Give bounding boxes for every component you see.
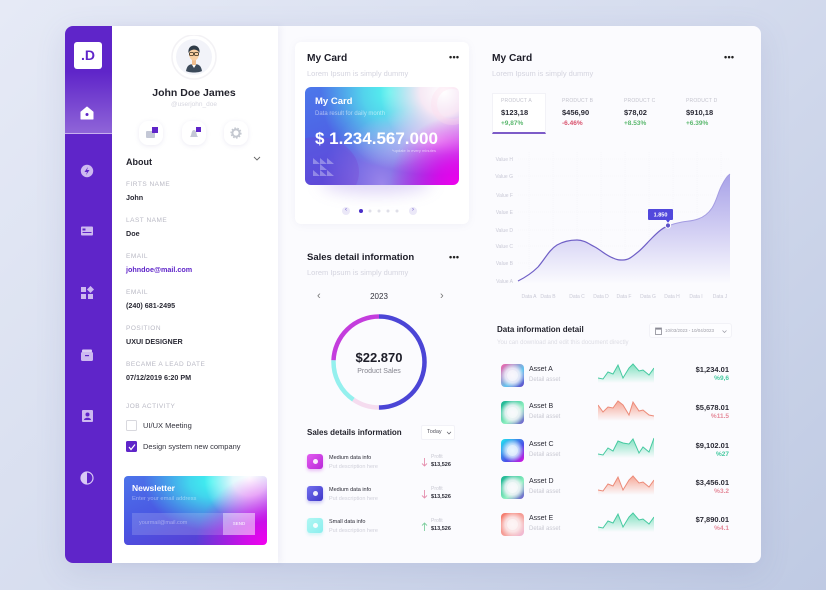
asset b value: $5,678.01 — [696, 403, 729, 412]
year selector: › — [440, 290, 444, 302]
area chart: Data A — [521, 294, 537, 300]
settings button — [224, 121, 248, 145]
carousel arrow left: ‹ — [345, 207, 347, 213]
icon: mail — [146, 127, 158, 138]
asset b thumbnail — [501, 401, 524, 424]
sales row 1: Medium data info — [329, 454, 371, 460]
sales row 1: $13,526 — [431, 462, 451, 468]
sales row 2: $13,526 — [431, 494, 451, 500]
product b — [562, 98, 593, 127]
asset a detail: Detail asset — [529, 377, 560, 383]
area chart: Value D — [496, 228, 513, 234]
product d: $910,18 — [686, 108, 713, 117]
job activity label: JOB ACTIVITY — [126, 403, 175, 410]
area chart: Data I — [689, 294, 703, 300]
active tab — [492, 93, 546, 134]
asset d sparkline — [598, 475, 654, 494]
checkbox: design system: Design system new company — [143, 442, 241, 451]
menu dots: ••• — [449, 52, 459, 62]
sidebar navigation — [65, 26, 112, 563]
logo — [74, 42, 102, 69]
asset e value: $7,890.01 — [696, 515, 729, 524]
position field — [126, 325, 183, 346]
asset d thumbnail — [501, 476, 524, 499]
product b: $456,90 — [562, 108, 589, 117]
last name field: Doe — [126, 229, 140, 238]
area chart: Value H — [496, 157, 513, 163]
year selector: ‹ — [317, 290, 321, 302]
product c: PRODUCT C — [624, 98, 655, 104]
asset d detail: Detail asset — [529, 489, 560, 495]
asset a name: Asset A — [529, 366, 553, 373]
sales row 1: Put description here — [329, 464, 378, 470]
donut value: $22.870 — [356, 350, 402, 365]
profile panel — [112, 26, 278, 563]
lead date field — [126, 361, 205, 382]
icon: archive box — [81, 350, 93, 361]
asset c detail: Detail asset — [529, 452, 560, 458]
icon: bell — [190, 127, 201, 137]
area chart: 1.850 — [654, 212, 667, 218]
area chart: Data H — [664, 294, 680, 300]
icon: cyan star — [307, 518, 323, 533]
last name field — [126, 217, 167, 238]
icon: blue star — [307, 486, 323, 501]
email field: johndoe@mail.com — [126, 265, 192, 274]
icon: magenta star — [307, 454, 323, 469]
checkbox: design system — [126, 441, 241, 452]
asset d name: Asset D — [529, 478, 554, 485]
date picker: 10/03/2023 - 10/04/2023 — [665, 328, 714, 333]
icon: contrast — [80, 471, 94, 485]
card note: *update in every minutes — [392, 148, 436, 153]
area chart: Data C — [569, 294, 585, 300]
area chart: Data G — [640, 294, 656, 300]
newsletter card — [124, 476, 267, 545]
asset c name: Asset C — [529, 441, 554, 448]
today dropdown — [421, 425, 455, 440]
phone field — [126, 289, 175, 310]
email field: EMAIL — [126, 253, 148, 260]
product d: +6.39% — [686, 120, 708, 127]
asset b percent: %11.5 — [711, 413, 729, 420]
icon: contacts — [82, 410, 93, 422]
send button: SEND — [233, 521, 245, 526]
about heading: About — [126, 157, 152, 167]
asset e percent: %4.1 — [714, 525, 729, 532]
newsletter title: Newsletter — [132, 483, 175, 493]
sales row 3: $13,526 — [431, 526, 451, 532]
first name field — [126, 181, 170, 202]
decorative ring — [431, 83, 473, 125]
asset a thumbnail — [501, 364, 524, 387]
phone field: (240) 681-2495 — [126, 301, 175, 310]
email input — [132, 513, 223, 535]
card heading: My Card — [315, 96, 352, 107]
donut chart — [331, 314, 427, 410]
profile name: John Doe James — [152, 87, 236, 99]
mail button — [139, 121, 163, 145]
carousel dots — [359, 209, 398, 213]
year selector — [317, 290, 444, 302]
sales row 1 — [306, 454, 451, 472]
newsletter subtitle: Enter your email address — [132, 496, 196, 502]
panel: my card — [295, 42, 469, 224]
sales heading: Sales detail information — [307, 252, 414, 263]
area chart: Value C — [496, 244, 513, 250]
triangle pattern — [313, 158, 334, 176]
icon: id card — [81, 226, 93, 236]
product c — [624, 98, 655, 127]
checkbox: meeting — [126, 420, 192, 431]
menu dots: ••• — [449, 252, 459, 262]
product c: $78,02 — [624, 108, 647, 117]
right heading: My Card — [492, 53, 532, 64]
position field: POSITION — [126, 325, 161, 332]
sales row 3: Small data info — [329, 518, 365, 524]
product d — [686, 98, 717, 127]
data subtitle: You can download and edit this document directly — [497, 340, 629, 346]
asset e detail: Detail asset — [529, 526, 560, 532]
last name field: LAST NAME — [126, 217, 167, 224]
product tabs — [492, 93, 717, 134]
right subtitle: Lorem Ipsum is simply dummy — [492, 69, 593, 78]
today dropdown: Today — [427, 429, 442, 435]
icon: widgets — [81, 286, 94, 299]
area chart: Value A — [496, 279, 514, 285]
area chart: Value F — [496, 193, 513, 199]
asset a sparkline — [598, 363, 654, 382]
first name field: FIRTS NAME — [126, 181, 170, 188]
icon: gear — [230, 127, 242, 139]
asset c value: $9,102.01 — [696, 441, 729, 450]
product a — [501, 98, 532, 127]
product a: $123,18 — [501, 108, 528, 117]
sales row 2: Put description here — [329, 496, 378, 502]
card caption: Data result for daily month — [315, 111, 385, 117]
lead date field: BECAME A LEAD DATE — [126, 361, 205, 368]
area chart: Data F — [616, 294, 632, 300]
icon: chevron — [254, 156, 260, 160]
email input: yourmail@mail.com — [139, 520, 187, 526]
active home highlight — [65, 72, 112, 134]
icon: home — [80, 106, 94, 120]
asset c sparkline — [598, 438, 654, 456]
sales row 2: Medium data info — [329, 486, 371, 492]
asset c thumbnail — [501, 439, 524, 462]
decorative wave — [275, 137, 359, 207]
sales row 3: Profit — [431, 518, 443, 524]
card subtitle: Lorem Ipsum is simply dummy — [307, 69, 408, 78]
checkbox: meeting: UI/UX Meeting — [143, 421, 192, 430]
carousel arrow right: › — [412, 207, 414, 213]
asset d value: $3,456.01 — [696, 478, 729, 487]
asset e sparkline — [598, 512, 654, 530]
sales row 1: Profit — [431, 454, 443, 460]
carousel arrow right — [409, 207, 417, 215]
avatar — [172, 35, 216, 80]
data heading: Data information detail — [497, 325, 584, 334]
area chart: Value G — [495, 174, 513, 180]
asset b detail: Detail asset — [529, 414, 560, 420]
date picker — [649, 323, 732, 338]
area chart: Data B — [540, 294, 556, 300]
profile handle: @userjohn_doe — [171, 101, 217, 108]
asset b sparkline — [598, 400, 654, 420]
notification button — [182, 121, 206, 145]
asset a value: $1,234.01 — [696, 365, 729, 374]
menu dots: ••• — [724, 52, 734, 62]
position field: UXUI DESIGNER — [126, 337, 183, 346]
email field — [126, 253, 192, 274]
sales row 3 — [306, 518, 451, 536]
product b: PRODUCT B — [562, 98, 593, 104]
product a: PRODUCT A — [501, 98, 532, 104]
carousel arrow left — [342, 207, 350, 215]
asset c percent: %27 — [716, 451, 729, 458]
asset e name: Asset E — [529, 515, 553, 522]
year selector: 2023 — [370, 292, 388, 301]
product a: +9,87% — [501, 120, 523, 127]
sales row 3: Put description here — [329, 528, 378, 534]
area chart — [495, 157, 730, 300]
icon: bolt — [80, 164, 94, 178]
donut caption: Product Sales — [357, 368, 401, 375]
sales subtitle: Lorem Ipsum is simply dummy — [307, 268, 408, 277]
asset e thumbnail — [501, 513, 524, 536]
product c: +8.53% — [624, 120, 646, 127]
first name field: John — [126, 193, 143, 202]
sales row 2: Profit — [431, 486, 443, 492]
card title: My Card — [307, 53, 347, 64]
card amount: $ 1.234.567.000 — [315, 129, 438, 148]
dashboard window — [65, 26, 761, 563]
asset b name: Asset B — [529, 403, 553, 410]
area chart: Data D — [593, 294, 609, 300]
lead date field: 07/12/2019 6:20 PM — [126, 373, 191, 382]
asset d percent: %3.2 — [714, 488, 729, 495]
sales row 2 — [306, 486, 451, 504]
area chart: Value E — [496, 210, 514, 216]
product b: -6.46% — [562, 120, 583, 127]
logo: .D — [81, 47, 95, 63]
asset a percent: %9,6 — [714, 375, 729, 382]
send button — [223, 513, 255, 535]
area chart: Value B — [496, 261, 514, 267]
product d: PRODUCT D — [686, 98, 717, 104]
gradient balance card — [305, 87, 459, 185]
card shadow — [321, 170, 431, 194]
phone field: EMAIL — [126, 289, 148, 296]
sales list heading: Sales details information — [307, 428, 402, 437]
area chart: Data J — [713, 294, 728, 300]
